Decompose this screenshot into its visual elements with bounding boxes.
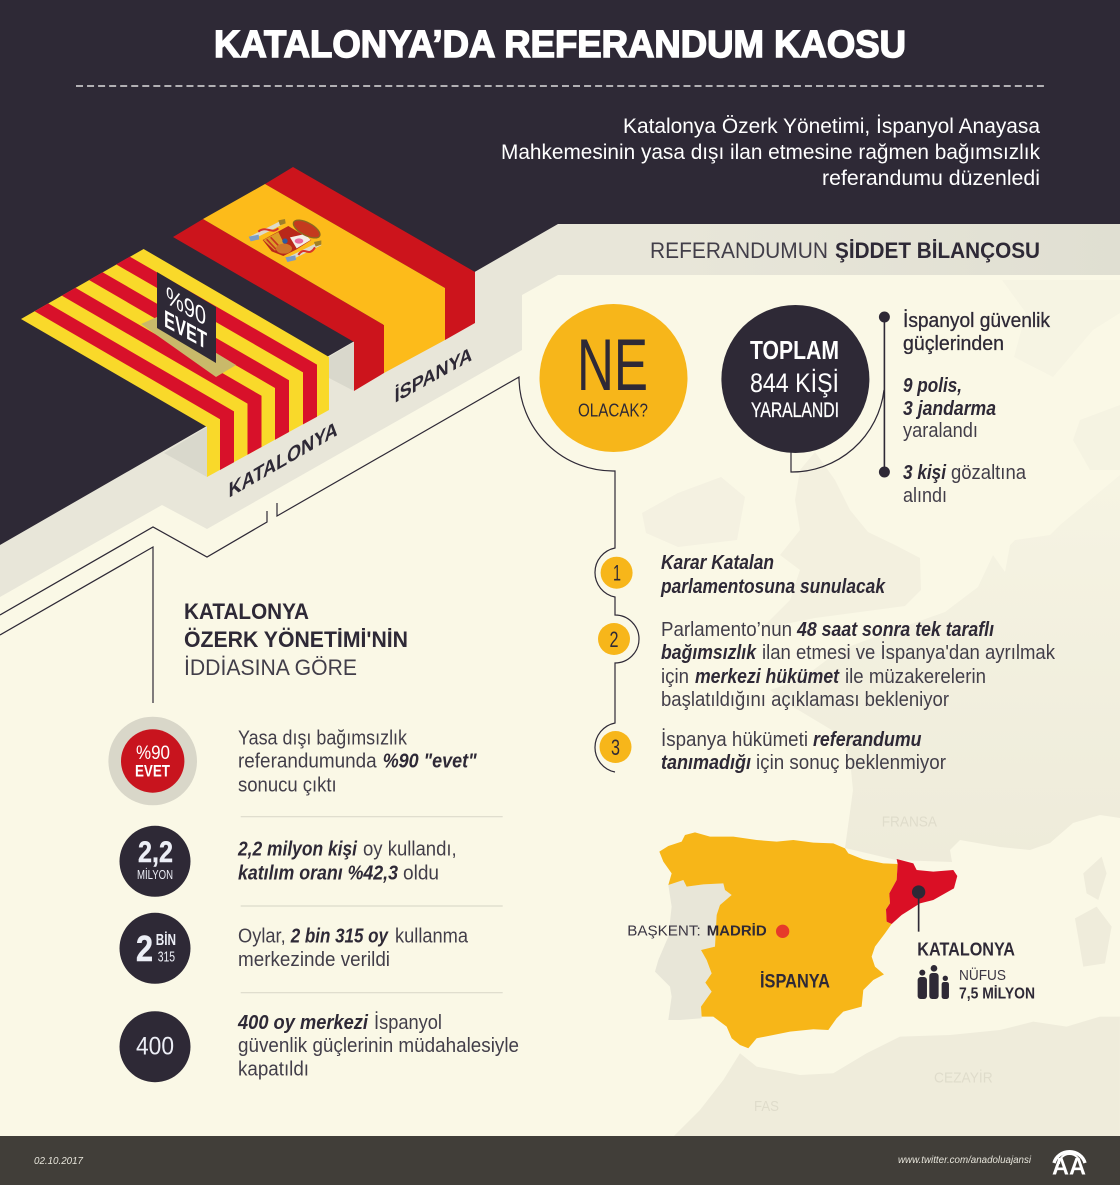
left heading: KATALONYA [184, 599, 309, 624]
stat: 400 centres closed [120, 1011, 519, 1082]
label: Katalonya: KATALONYA [229, 416, 338, 503]
heading: violence balance: ŞİDDET BİLANÇOSU [835, 238, 1040, 263]
stat: 2.2 million voters: katılım oranı %42,3 [238, 862, 398, 884]
stat: 2.2 million voters [120, 826, 457, 897]
stat: 400 centres closed: güvenlik güçlerinin müdahalesiyle [238, 1035, 519, 1057]
step 3: tanımadığı [661, 752, 751, 774]
background map of western Europe [642, 280, 1120, 1137]
step 2: 48 saat sonra tek taraflı [796, 619, 994, 641]
label: capital Madrid [627, 923, 767, 940]
step 2: için [661, 666, 689, 688]
circle: total injured: TOPLAM [750, 335, 839, 365]
stat: 400 centres closed: 400 oy merkezi [237, 1012, 368, 1034]
stat: 400 centres closed: kapatıldı [238, 1059, 309, 1081]
label: Katalonya on map: KATALONYA [917, 940, 1015, 960]
left heading: İDDİASINA GÖRE [184, 655, 357, 680]
stat: 400 centres closed: 400 [136, 1032, 174, 1060]
label: capital Madrid: BAŞKENT: [627, 923, 701, 940]
label: Ispanya: İSPANYA [395, 342, 472, 408]
circle: total injured: 844 KİŞİ [750, 367, 839, 398]
step 2: 2 [610, 627, 618, 652]
heading: violence balance: REFERANDUMUN [650, 238, 828, 263]
circle: total injured: YARALANDI [751, 399, 839, 422]
injury details list: güçlerinden [903, 333, 1004, 355]
stat: 2.2 million voters: oldu [403, 862, 439, 884]
footer bar: www.twitter.com/anadoluajansi [898, 1155, 1032, 1166]
step 2: merkezi hükümet [695, 666, 840, 688]
injury details list: 9 polis, [903, 375, 962, 397]
intro text [501, 115, 1040, 190]
injury details list: 3 jandarma [903, 398, 996, 420]
injury details list: gözaltına [951, 462, 1027, 484]
step 3 [600, 728, 946, 774]
stat: 90 percent yes: referandumunda [238, 751, 378, 773]
step 3: için sonuç beklenmiyor [756, 752, 946, 774]
intro text: Mahkemesinin yasa dışı ilan etmesine rağmen bağımsızlık [501, 141, 1040, 164]
step 2: ile müzakerelerin [845, 666, 986, 688]
footer bar [0, 1136, 1120, 1185]
step 1 [601, 552, 886, 598]
stat: 90 percent yes: %90 [136, 743, 170, 764]
stat: 2.2 million voters: MİLYON [137, 867, 173, 882]
icon: Anadolu Agency logo: AA [1052, 1154, 1086, 1180]
step 2: Parlamento’nun [661, 619, 792, 641]
population text: 7,5 MİLYON [959, 984, 1035, 1002]
stat: 2315 polling centres: 2 bin 315 oy [290, 926, 389, 948]
circle: total injured [721, 305, 869, 453]
map labels: neighbouring countries [754, 814, 993, 1115]
flag: Spain folded [173, 167, 475, 391]
circle: Ne olacak [540, 304, 688, 452]
gray isometric band [0, 224, 1120, 597]
left heading: ÖZERK YÖNETİMİ'NİN [184, 627, 408, 652]
ballot slot [141, 317, 236, 377]
stat: 90 percent yes: EVET [135, 762, 170, 780]
label: Ispanya on map: İSPANYA [760, 971, 830, 992]
stat: 2.2 million voters: oy kullandı, [363, 839, 457, 861]
title: KATALONYA’DA REFERANDUM KAOSU [214, 24, 906, 66]
label: capital Madrid: MADRİD [707, 923, 767, 940]
map labels: neighbouring countries: FAS [754, 1098, 779, 1115]
intro text: referandumu düzenledi [822, 167, 1040, 190]
stat: 2.2 million voters: 2,2 [138, 836, 173, 869]
step 3: referandumu [813, 729, 922, 751]
step 3: İspanya hükümeti [661, 728, 808, 751]
stat: 2315 polling centres [120, 913, 469, 984]
stat: 2.2 million voters: 2,2 milyon kişi [237, 839, 357, 861]
injury details list: alındı [903, 485, 947, 507]
circle: Ne olacak: OLACAK? [578, 400, 648, 420]
stat: 400 centres closed: İspanyol [374, 1011, 442, 1034]
population text: NÜFUS [959, 966, 1006, 984]
injury details list: 3 kişi [903, 462, 946, 484]
ballot card: %90 EVET [157, 272, 216, 363]
map labels: neighbouring countries: CEZAYİR [934, 1069, 993, 1087]
step 2: ilan etmesi ve İspanya'dan ayrılmak [762, 641, 1056, 664]
circle: Ne olacak: NE [577, 325, 648, 406]
map of Spain, Portugal and Catalonia [655, 832, 957, 1048]
icon: Spanish coat of arms [249, 217, 323, 262]
injury details list: İspanyol güvenlik [903, 309, 1051, 332]
step 2: bağımsızlık [661, 642, 757, 664]
stat: 90 percent yes: %90 "evet" [383, 751, 477, 773]
intro text: Katalonya Özerk Yönetimi, İspanyol Anayasa [623, 115, 1040, 138]
stat: 2315 polling centres: BİN [156, 931, 176, 949]
step 2 [598, 619, 1056, 711]
stat: 2315 polling centres: 315 [158, 948, 175, 966]
left heading [184, 599, 408, 680]
heading: violence balance [650, 238, 1040, 263]
stat: 90 percent yes: Yasa dışı bağımsızlık [238, 727, 408, 749]
stat: 2315 polling centres: kullanma [395, 926, 469, 948]
icon: people [918, 965, 949, 999]
step 2: başlatıldığını açıklaması bekleniyor [661, 689, 949, 711]
ballot card: %90 EVET: %90 [166, 281, 206, 332]
step 1: 1 [613, 560, 621, 586]
stat: 90 percent yes: sonucu çıktı [238, 775, 337, 797]
map labels: neighbouring countries: FRANSA [882, 814, 937, 831]
population text [959, 966, 1035, 1002]
step 1: Karar Katalan [661, 552, 774, 574]
flag: Catalonia folded [21, 249, 329, 477]
stat: 2315 polling centres: 2 [136, 928, 153, 969]
stat: 2315 polling centres: merkezinde verildi [238, 949, 390, 971]
step 3: 3 [611, 735, 620, 760]
stat: 90 percent yes [108, 717, 477, 805]
injury details list: yaralandı [903, 420, 978, 442]
dark header background [0, 0, 1120, 545]
stat: 2315 polling centres: Oylar, [238, 926, 286, 948]
ballot card: %90 EVET: EVET [164, 305, 207, 355]
footer bar: 02.10.2017 [34, 1156, 83, 1167]
connector lines [0, 317, 884, 772]
step 1: parlamentosuna sunulacak [660, 576, 886, 598]
injury details list [879, 309, 1051, 507]
